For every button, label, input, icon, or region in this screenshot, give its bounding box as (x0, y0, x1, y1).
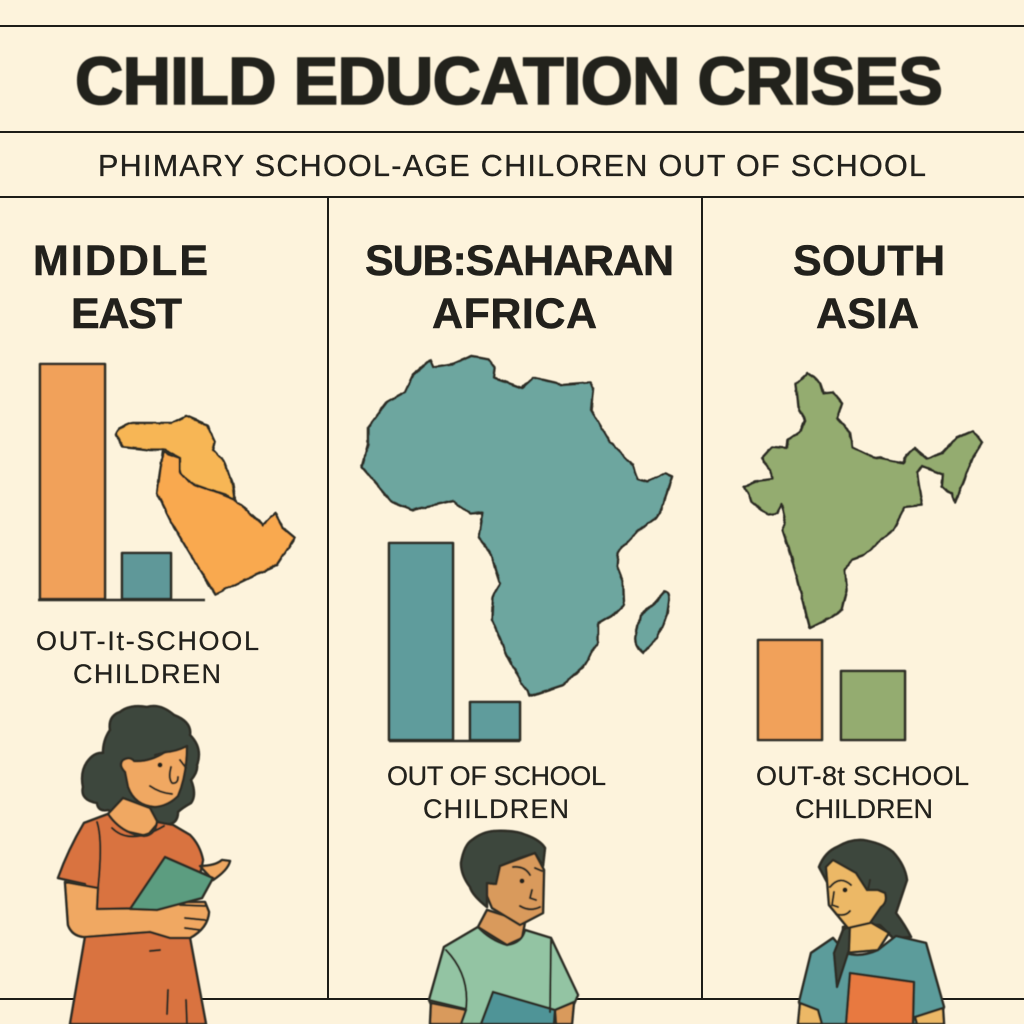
label: South Asia: OUT-8t SCHOOL (756, 761, 969, 791)
illustration: girl reading a book (58, 706, 230, 1024)
panel: Sub-Saharan Africa (362, 237, 674, 1024)
face details (513, 867, 542, 909)
face details (150, 752, 186, 794)
subtitle: PHIMARY SCHOOL-AGE CHILOREN OUT OF SCHOOL (98, 149, 926, 183)
heading: South Asia (793, 237, 945, 338)
heading: Middle East (33, 237, 208, 338)
heading: Middle East: EAST (71, 290, 182, 338)
bar chart: Middle East (38, 364, 205, 600)
heading: Middle East: MIDDLE (33, 237, 208, 285)
label: South Asia: CHILDREN (795, 794, 933, 824)
label: Middle East (36, 626, 259, 689)
title: CHILD EDUCATION CRISES (75, 44, 943, 119)
heading: Sub-Saharan Africa (365, 237, 674, 338)
map: India (744, 373, 982, 628)
heading: Sub-Saharan Africa: SUB:SAHARAN (365, 237, 674, 285)
bar chart: South Asia (758, 640, 905, 740)
label: Middle East: OUT-It-SCHOOL (36, 626, 259, 656)
label: Middle East: CHILDREN (73, 659, 221, 689)
heading: South Asia: SOUTH (793, 237, 945, 285)
face details (832, 888, 850, 915)
heading: South Asia: ASIA (816, 290, 919, 338)
label: South Asia (756, 761, 969, 824)
heading: Sub-Saharan Africa: AFRICA (432, 290, 597, 338)
label: Africa (387, 761, 606, 824)
panel: South Asia (744, 237, 982, 1024)
panel: Middle East (33, 237, 295, 1024)
map: Africa and Madagascar (362, 356, 672, 696)
bar chart: Africa (389, 543, 520, 741)
illustration: girl with folder (798, 840, 944, 1024)
illustration: boy with book (429, 831, 578, 1024)
label: Africa: OUT OF SCHOOL (387, 761, 606, 791)
map: Middle East (116, 416, 295, 594)
label: Africa: CHILDREN (423, 794, 569, 824)
